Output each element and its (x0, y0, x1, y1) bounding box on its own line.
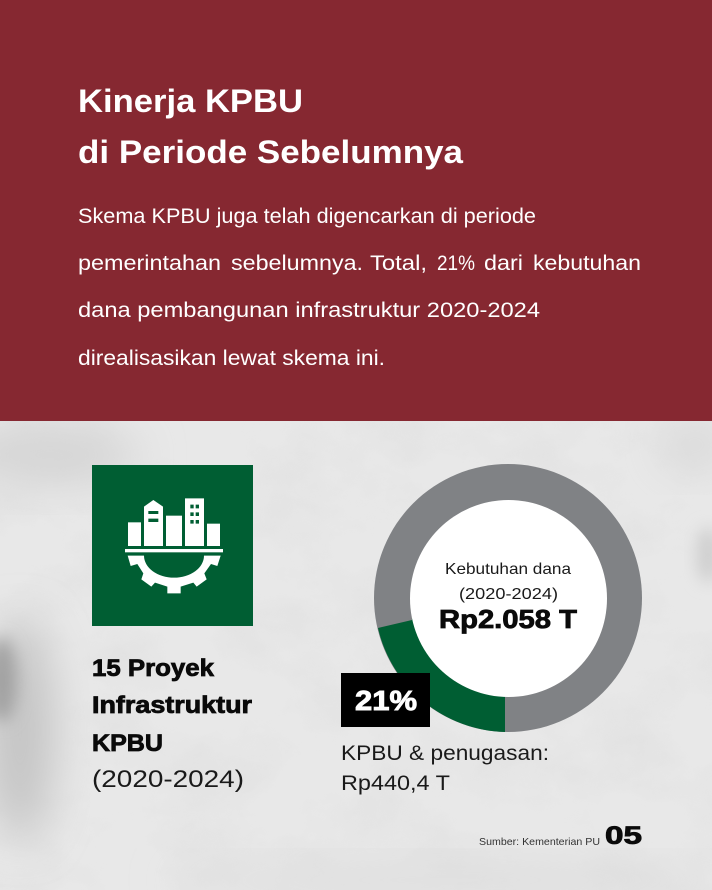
intro paragraph: pemerintahan (78, 251, 221, 275)
title: Kinerja KPBU (78, 83, 303, 119)
intro paragraph: Skema KPBU juga telah digencarkan di periode (78, 204, 536, 228)
title: di Periode Sebelumnya (78, 134, 463, 170)
panel: red header (0, 0, 712, 421)
callout: 21% badge: 21% (355, 685, 417, 716)
project count label: (2020-2024) (92, 766, 244, 793)
page number: 05 (605, 822, 642, 850)
intro paragraph: sebelumnya. (231, 251, 363, 275)
intro paragraph: direalisasikan lewat skema ini. (78, 346, 385, 370)
donut centre label: (2020-2024) (459, 586, 558, 603)
textured grey cloud background (0, 420, 712, 890)
KPBU amount label: Rp440,4 T (341, 772, 450, 795)
intro paragraph: 21% (437, 251, 475, 275)
donut chart: funding need (374, 464, 642, 732)
intro paragraph (78, 204, 641, 370)
donut centre label: Kebutuhan dana (445, 561, 571, 578)
donut centre label: Rp2.058 T (439, 604, 577, 634)
donut centre label (439, 561, 577, 634)
intro paragraph: dana pembangunan infrastruktur 2020-2024 (78, 298, 540, 322)
title (78, 83, 463, 170)
project count label: Infrastruktur (92, 692, 252, 719)
panel: project count (92, 465, 253, 793)
green segment: KPBU share (378, 598, 505, 732)
KPBU amount label (341, 742, 549, 795)
KPBU amount label: KPBU & penugasan: (341, 742, 549, 765)
intro paragraph: dari (484, 251, 523, 275)
intro paragraph: Total, (370, 251, 427, 275)
callout: 21% badge (341, 673, 430, 727)
intro paragraph: kebutuhan (533, 251, 641, 275)
project count label: KPBU (92, 730, 163, 757)
project count label (92, 655, 252, 793)
icon: city on gear (92, 465, 253, 626)
source note: Sumber: Kementerian PU (479, 836, 600, 848)
project count label: 15 Proyek (92, 655, 215, 682)
